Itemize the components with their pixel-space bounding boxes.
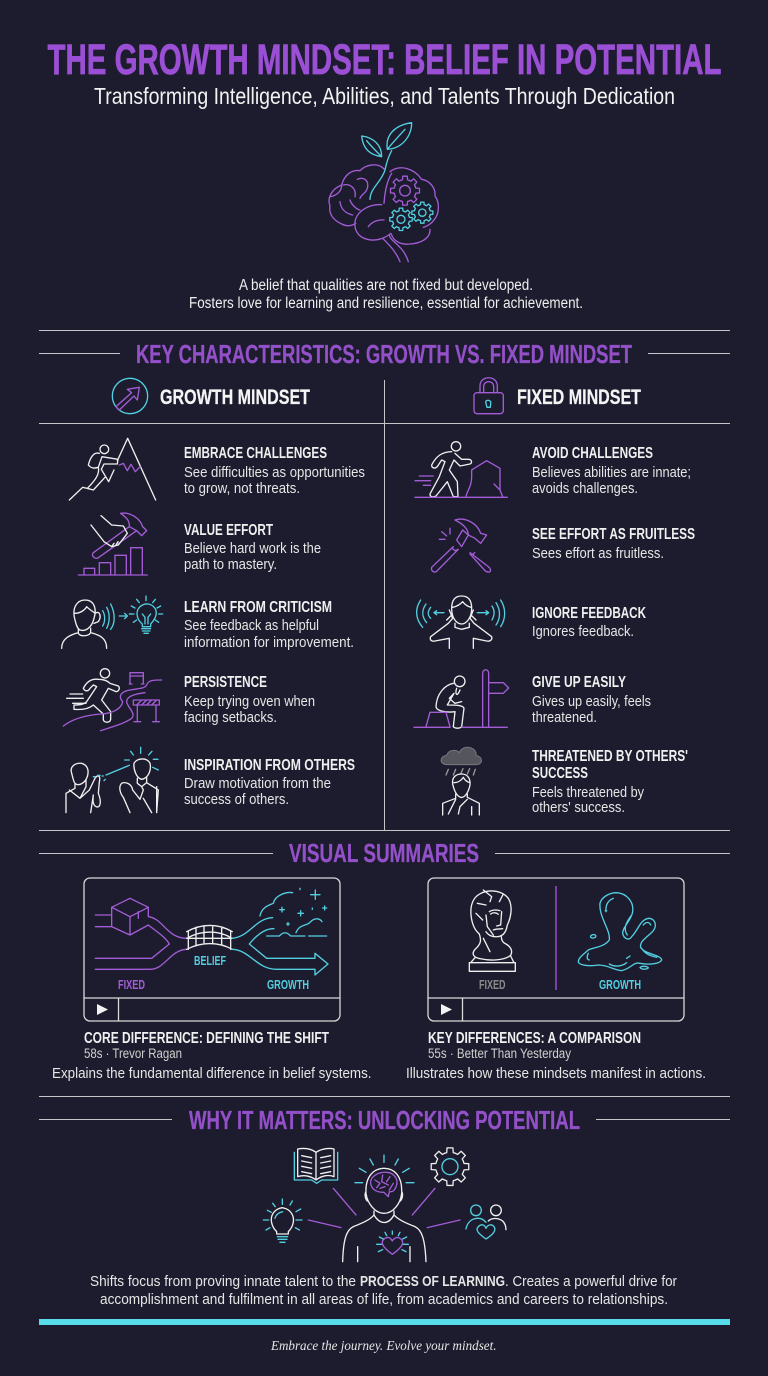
closing text: PROCESS OF LEARNING	[360, 1273, 505, 1290]
icon: growth arrow in circle	[112, 378, 148, 414]
icon: runner on winding path with hurdles	[63, 669, 162, 731]
icon: brain with sprout and gears	[329, 123, 438, 262]
label: growth: GROWTH	[267, 978, 309, 992]
panel: fixed mindset	[414, 378, 695, 816]
characteristic: threatened by others' success: others' success.	[532, 799, 625, 816]
characteristic: threatened by others' success: THREATENED BY OTHERS'	[532, 748, 688, 765]
video frame and player bar	[428, 878, 684, 1021]
icon: gear	[431, 1148, 469, 1185]
characteristic: avoid challenges	[415, 442, 691, 497]
icon: two people with inspiration rays	[66, 747, 158, 813]
footer tagline: Embrace the journey. Evolve your mindset.	[270, 1338, 496, 1353]
icon: open book	[294, 1148, 338, 1183]
characteristic: embrace challenges	[69, 438, 365, 500]
characteristic: threatened by others' success: SUCCESS	[532, 765, 588, 782]
characteristic: avoid challenges: avoids challenges.	[532, 480, 638, 497]
characteristic: learn from criticism: See feedback as helpful	[184, 617, 319, 634]
intro text: A belief that qualities are not fixed but developed.	[239, 277, 533, 294]
characteristic: value effort	[78, 513, 321, 575]
icon: central person	[343, 1155, 426, 1262]
characteristic: ignore feedback	[417, 596, 646, 648]
characteristic: persistence: PERSISTENCE	[184, 674, 267, 691]
closing text: . Creates a powerful drive for	[505, 1273, 677, 1290]
panel: growth mindset	[62, 378, 365, 813]
characteristic: value effort: VALUE EFFORT	[184, 522, 273, 539]
icon: person sitting by signpost	[414, 670, 509, 728]
icon: light bulb	[263, 1199, 302, 1242]
label: belief: BELIEF	[194, 954, 226, 968]
icon: broken hammer	[432, 519, 491, 572]
icon: play button	[97, 1004, 108, 1015]
heading: why it matters: WHY IT MATTERS: UNLOCKING POTENTIAL	[189, 1105, 580, 1135]
accent bar	[39, 1319, 730, 1325]
icon: play button	[441, 1004, 452, 1015]
characteristic: value effort: path to mastery.	[184, 556, 277, 573]
divider	[555, 886, 557, 990]
closing text: Shifts focus from proving innate talent to the	[90, 1273, 356, 1290]
characteristic: inspiration from others: success of others.	[184, 791, 289, 808]
video title: KEY DIFFERENCES: A COMPARISON	[428, 1030, 641, 1047]
characteristic: give up easily: threatened.	[532, 709, 597, 726]
characteristic: see effort as fruitless: Sees effort as fruitless.	[532, 545, 664, 562]
characteristic: learn from criticism: LEARN FROM CRITICISM	[184, 599, 332, 616]
label: fixed: FIXED	[118, 978, 145, 992]
panel: video card core difference	[52, 878, 372, 1082]
characteristic: ignore feedback: IGNORE FEEDBACK	[532, 605, 646, 622]
characteristic: persistence: facing setbacks.	[184, 709, 277, 726]
characteristic: embrace challenges: to grow, not threats.	[184, 480, 300, 497]
icon: person covering ears	[417, 596, 505, 648]
icon: listening person and light bulb	[62, 596, 163, 648]
video frame and player bar	[84, 878, 340, 1021]
characteristic: value effort: Believe hard work is the	[184, 540, 321, 557]
video meta: 55s · Better Than Yesterday	[428, 1046, 571, 1061]
subtitle: Transforming Intelligence, Abilities, and Talents Through Dedication	[94, 83, 675, 109]
characteristic: embrace challenges: EMBRACE CHALLENGES	[184, 445, 327, 462]
video title: CORE DIFFERENCE: DEFINING THE SHIFT	[84, 1030, 329, 1047]
column heading: growth mindset: GROWTH MINDSET	[160, 386, 310, 409]
characteristic: threatened by others' success: Feels threatened by	[532, 784, 644, 801]
heading: visual summaries: VISUAL SUMMARIES	[289, 838, 479, 868]
characteristic: give up easily	[414, 670, 651, 728]
characteristic: give up easily: GIVE UP EASILY	[532, 674, 626, 691]
video meta: 58s · Trevor Ragan	[84, 1046, 182, 1061]
icon: person walking away from rock	[415, 442, 507, 497]
characteristic: inspiration from others	[66, 747, 355, 813]
icon: padlock	[474, 378, 503, 414]
connector lines	[308, 1188, 460, 1228]
characteristic: persistence: Keep trying oven when	[184, 693, 315, 710]
label: growth: GROWTH	[599, 978, 641, 992]
panel: video card key differences	[406, 878, 706, 1082]
icon: person under rain cloud	[441, 747, 481, 815]
closing text	[90, 1273, 677, 1308]
icon: climber on mountain	[69, 438, 156, 500]
video description: Illustrates how these mindsets manifest in actions.	[406, 1065, 706, 1082]
icon: hand with hammer and bars	[78, 513, 147, 575]
characteristic: avoid challenges: Believes abilities are innate;	[532, 464, 691, 481]
characteristic: learn from criticism: information for improvement.	[184, 634, 354, 651]
intro text	[189, 277, 583, 312]
characteristic: ignore feedback: Ignores feedback.	[532, 623, 634, 640]
label: fixed: FIXED	[479, 978, 506, 992]
characteristic: inspiration from others: INSPIRATION FROM OTHERS	[184, 757, 355, 774]
characteristic: see effort as fruitless	[432, 519, 695, 572]
characteristic: embrace challenges: See difficulties as opportunities	[184, 464, 365, 481]
column heading: fixed mindset: FIXED MINDSET	[517, 386, 641, 409]
characteristic: persistence	[63, 669, 315, 731]
characteristic: see effort as fruitless: SEE EFFORT AS FRUITLESS	[532, 526, 695, 543]
illustration: statue bust	[469, 890, 662, 971]
icon: people with heart	[466, 1205, 506, 1239]
characteristic: learn from criticism	[62, 596, 354, 651]
closing text: accomplishment and fulfilment in all areas of life, from academics and careers to relationships.	[100, 1291, 668, 1308]
characteristic: inspiration from others: Draw motivation from the	[184, 775, 331, 792]
diagram: fixed to growth via belief bridge	[95, 888, 328, 975]
characteristic: threatened by others' success	[441, 747, 688, 816]
intro text: Fosters love for learning and resilience, essential for achievement.	[189, 295, 583, 312]
video description: Explains the fundamental difference in belief systems.	[52, 1065, 372, 1082]
characteristic: avoid challenges: AVOID CHALLENGES	[532, 445, 653, 462]
illustration: person with potential icons	[263, 1148, 506, 1262]
characteristic: give up easily: Gives up easily, feels	[532, 693, 651, 710]
